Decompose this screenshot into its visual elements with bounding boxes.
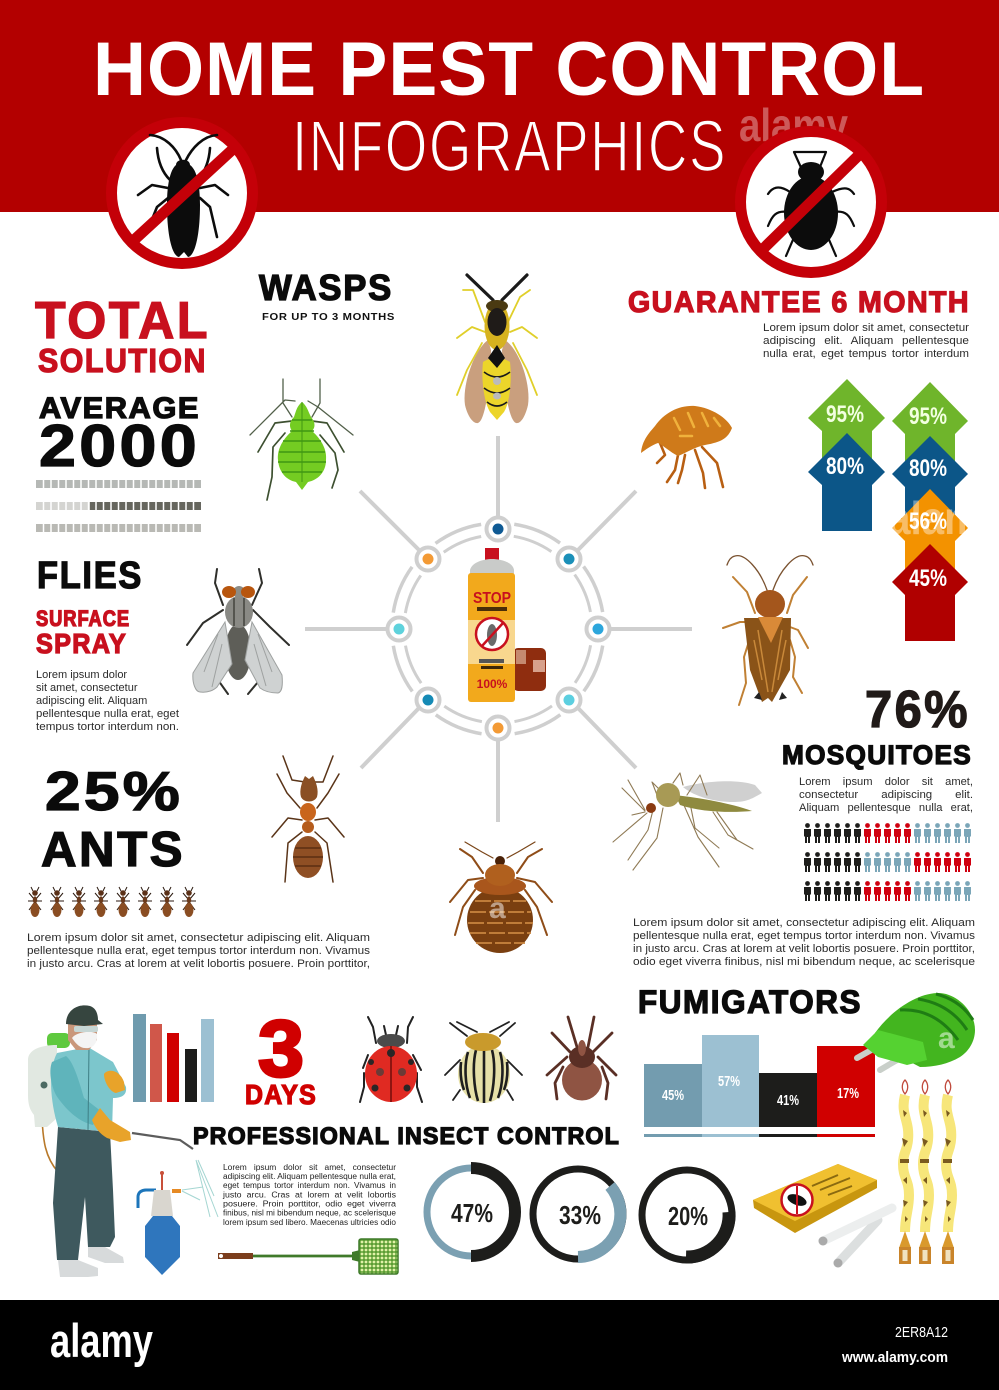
- icon: spray can and jar: 100%: [477, 677, 508, 691]
- icon: colorado beetle: [445, 1022, 522, 1103]
- icon: ladybug: [360, 1017, 422, 1102]
- fumigators bar chart: 17%: [837, 1085, 859, 1102]
- left column: average 2000: 2000: [39, 413, 200, 479]
- flies text block: pellentesque nulla erat, eget: [36, 708, 179, 720]
- arrow chart: two stacks: 56%: [909, 508, 947, 535]
- flies text block: tempus tortor interdum non.: [36, 721, 179, 733]
- text block: professional control: [222, 1163, 397, 1227]
- footer bar: 2ER8A12: [895, 1324, 948, 1341]
- icon: ant: [272, 756, 344, 882]
- icon: pest control worker: [28, 1005, 193, 1277]
- icon: plug-in fumigator: a: [938, 1022, 955, 1055]
- footer bar: alamy: [50, 1314, 153, 1367]
- arrow chart: two stacks: 95%: [826, 401, 864, 428]
- flies text block: sit amet, consectetur: [36, 682, 138, 694]
- icon: prohibited cockroach: [112, 122, 252, 264]
- text block: professional control: eget tempus tortor interdum non. Vivamus in: [223, 1181, 396, 1190]
- stat: 76%: 76%: [865, 681, 970, 739]
- stat: 3 days: DAYS: [245, 1079, 317, 1110]
- icon: tick: [547, 1017, 616, 1100]
- mosquitoes text block: [799, 776, 973, 814]
- ants text block: in justo arcu. Cras at lorem at velit lobortis posuere. Proin porttitor,: [27, 958, 370, 970]
- text block: professional control: lorem ipsum sed libero. Maecenas ultricies odio: [223, 1218, 397, 1227]
- flies text block: [36, 669, 179, 733]
- text block: professional control: Lorem ipsum dolor sit amet, consectetur: [223, 1163, 396, 1172]
- guarantee text block: [763, 322, 969, 360]
- icon: spray bottle: [138, 1160, 218, 1275]
- flies text block: adipiscing elit. Aliquam: [36, 695, 147, 707]
- text block: professional control: posuere. Proin porttitor, odio eget viverra: [223, 1200, 397, 1208]
- left bar chart: [133, 1014, 214, 1102]
- icon: spray can and jar: STOP: [473, 590, 511, 607]
- donut chart 47%: 47%: [451, 1198, 493, 1228]
- mosquitoes text block: Lorem ipsum dolor sit amet,: [799, 776, 973, 788]
- watermark: alamy: [739, 99, 848, 151]
- donut chart 20%: 20%: [668, 1201, 708, 1231]
- fumigators bar chart: 41%: [777, 1092, 799, 1109]
- bottom right text block: Lorem ipsum dolor sit amet, consectetur adipiscing elit. Aliquam: [633, 917, 975, 929]
- donut chart 20%: [642, 1170, 732, 1260]
- flies text block: Lorem ipsum dolor: [36, 669, 127, 681]
- icon: aphid: [250, 379, 353, 500]
- guarantee heading: GUARANTEE 6 MONTH: [628, 286, 970, 319]
- icon: fly swatter: [218, 1239, 398, 1274]
- text block: professional control: adipiscing elit. Aliquam pellentesque nulla erat,: [223, 1172, 396, 1181]
- arrow chart: two stacks: 80%: [826, 453, 864, 480]
- left column: total solution: TOTAL: [35, 292, 210, 350]
- watermark: alam: [888, 492, 980, 544]
- text block: professional control: finibus, nisl mi bibendum neque, ac scelerisque: [223, 1208, 397, 1218]
- donut chart 33%: 33%: [559, 1200, 601, 1230]
- surface spray heading: [36, 606, 130, 659]
- surface spray heading: SPRAY: [36, 628, 127, 659]
- guarantee text block: adipiscing elit. Aliquam pellentesque: [763, 335, 969, 347]
- header banner: [0, 0, 999, 212]
- left column: average 2000: [39, 392, 200, 479]
- left column: total solution: [35, 292, 210, 379]
- fumigators bar chart: [644, 1035, 875, 1137]
- icon: cockroach: [723, 556, 813, 705]
- icon: fly: [187, 569, 289, 694]
- bottom right text block: [633, 917, 976, 968]
- stat: 3 days: 3: [258, 1004, 304, 1093]
- fumigators bar chart: 45%: [662, 1087, 684, 1104]
- arrow chart: two stacks: [808, 379, 968, 641]
- icon: prohibited beetle: [740, 132, 882, 272]
- guarantee text block: nulla erat, eget tempus tortor interdum: [763, 348, 969, 360]
- heading: professional insect control: PROFESSIONAL INSECT CONTROL: [193, 1123, 620, 1150]
- text block: professional control: justo arcu. Cras at lorem at velit lobortis: [222, 1190, 396, 1200]
- arrow chart: two stacks: 45%: [909, 565, 947, 592]
- bottom right text block: odio eget viverra finibus, nisl mi bibendum neque, ac scelerisque: [633, 956, 975, 968]
- fumigators bar chart: 57%: [718, 1073, 740, 1090]
- title: home pest control: HOME PEST CONTROL: [93, 27, 925, 112]
- icon: flea: [641, 406, 732, 488]
- ants text block: pellentesque nulla erat, eget tempus tortor interdum non. Vivamus: [27, 945, 371, 957]
- icon: spray can and jar: [468, 548, 546, 702]
- footer bar: www.alamy.com: [841, 1349, 948, 1366]
- guarantee text block: Lorem ipsum dolor sit amet, consectetur: [763, 322, 969, 334]
- donut chart 33%: [533, 1169, 623, 1259]
- wasps heading: WASPS: [259, 267, 393, 308]
- icon: mosquito: [613, 773, 762, 870]
- fumigators heading: FUMIGATORS: [638, 984, 862, 1020]
- mosquitoes text block: Aliquam pellentesque nulla erat,: [799, 802, 973, 814]
- icon: fumigator tablets box and sticks: [753, 1164, 892, 1268]
- flies heading: FLIES: [37, 555, 143, 597]
- wasps heading: FOR UP TO 3 MONTHS: [262, 311, 395, 323]
- ants text block: Lorem ipsum dolor sit amet, consectetur adipiscing elit. Aliquam: [27, 932, 370, 944]
- ant row pictogram: [28, 887, 196, 917]
- stat: 25% ants: [41, 760, 185, 877]
- icon: plug-in fumigator: [857, 993, 975, 1070]
- stat: 3 days: [245, 1004, 317, 1110]
- ants text block: [27, 932, 371, 970]
- surface spray heading: SURFACE: [36, 606, 130, 631]
- bottom right text block: in justo arcu. Cras at lorem at velit lobortis posuere. Proin porttitor,: [633, 943, 975, 955]
- stat: 25% ants: ANTS: [41, 823, 185, 877]
- progress bars: [36, 478, 201, 534]
- people pictogram chart: [804, 823, 971, 901]
- donut chart 47%: [427, 1168, 515, 1256]
- bottom right text block: pellentesque nulla erat, eget tempus tortor interdum non. Vivamus: [633, 930, 976, 942]
- stat: 25% ants: 25%: [45, 760, 183, 822]
- mosquitoes text block: consectetur adipiscing elit.: [799, 789, 973, 801]
- central hub diagram: [305, 436, 692, 822]
- footer bar: [0, 1300, 999, 1390]
- left column: average 2000: AVERAGE: [39, 392, 200, 425]
- mosquitoes heading: MOSQUITOES: [782, 740, 972, 770]
- subtitle: infographics: INFOGRAPHICS: [292, 107, 727, 187]
- arrow chart: two stacks: 95%: [909, 403, 947, 430]
- arrow chart: two stacks: 80%: [909, 455, 947, 482]
- icon: wasp: [457, 275, 537, 423]
- icon: bed bug: [450, 842, 552, 953]
- left column: total solution: SOLUTION: [38, 342, 207, 379]
- icon: bed bug: a: [489, 892, 506, 925]
- icon: sticky fly strips: [899, 1080, 954, 1264]
